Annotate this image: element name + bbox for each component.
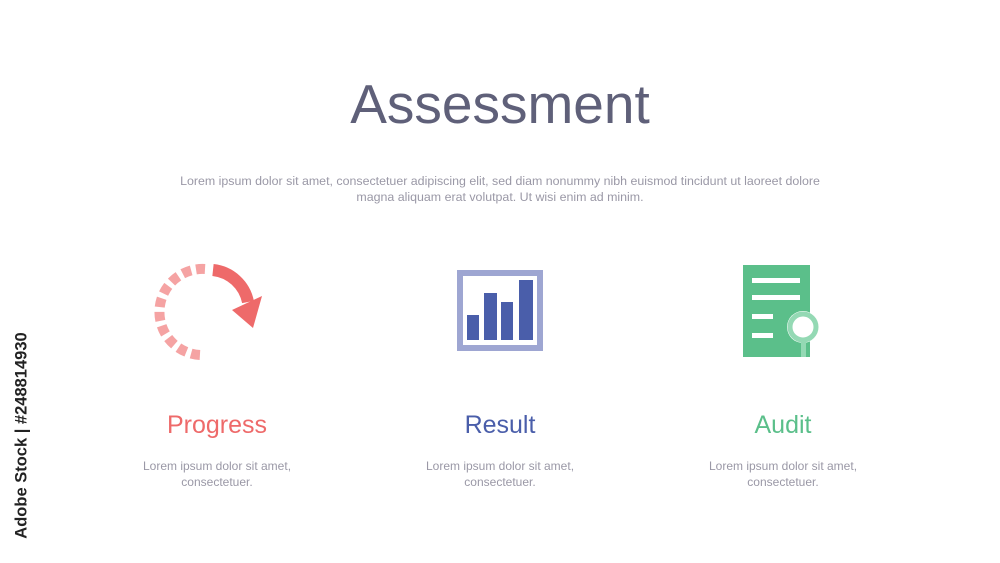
title: Assessment bbox=[350, 73, 650, 135]
icon: audit document bbox=[743, 265, 818, 357]
text: result: Lorem ipsum dolor sit amet, bbox=[426, 459, 574, 473]
icon: result bar chart bbox=[457, 270, 543, 351]
text: audit: Lorem ipsum dolor sit amet, bbox=[709, 459, 857, 473]
icon: progress arrow bbox=[154, 264, 262, 360]
label: result: Result bbox=[465, 411, 535, 439]
label: audit: Audit bbox=[754, 411, 811, 439]
vertical watermark id: Adobe Stock | #248814930 bbox=[12, 332, 30, 539]
subtitle text: magna aliquam erat volutpat. Ut wisi enim ad minim. bbox=[356, 190, 644, 204]
text: progress: consectetuer. bbox=[181, 475, 253, 489]
subtitle text bbox=[180, 174, 820, 204]
text: audit bbox=[709, 459, 857, 489]
subtitle text: Lorem ipsum dolor sit amet, consectetuer adipiscing elit, sed diam nonummy nibh euismod tincidunt ut laoreet dolore bbox=[180, 174, 820, 188]
text: result bbox=[426, 459, 574, 489]
text: result: consectetuer. bbox=[464, 475, 536, 489]
text: audit: consectetuer. bbox=[747, 475, 819, 489]
label: progress: Progress bbox=[167, 411, 267, 439]
text: progress: Lorem ipsum dolor sit amet, bbox=[143, 459, 291, 473]
text: progress bbox=[143, 459, 291, 489]
